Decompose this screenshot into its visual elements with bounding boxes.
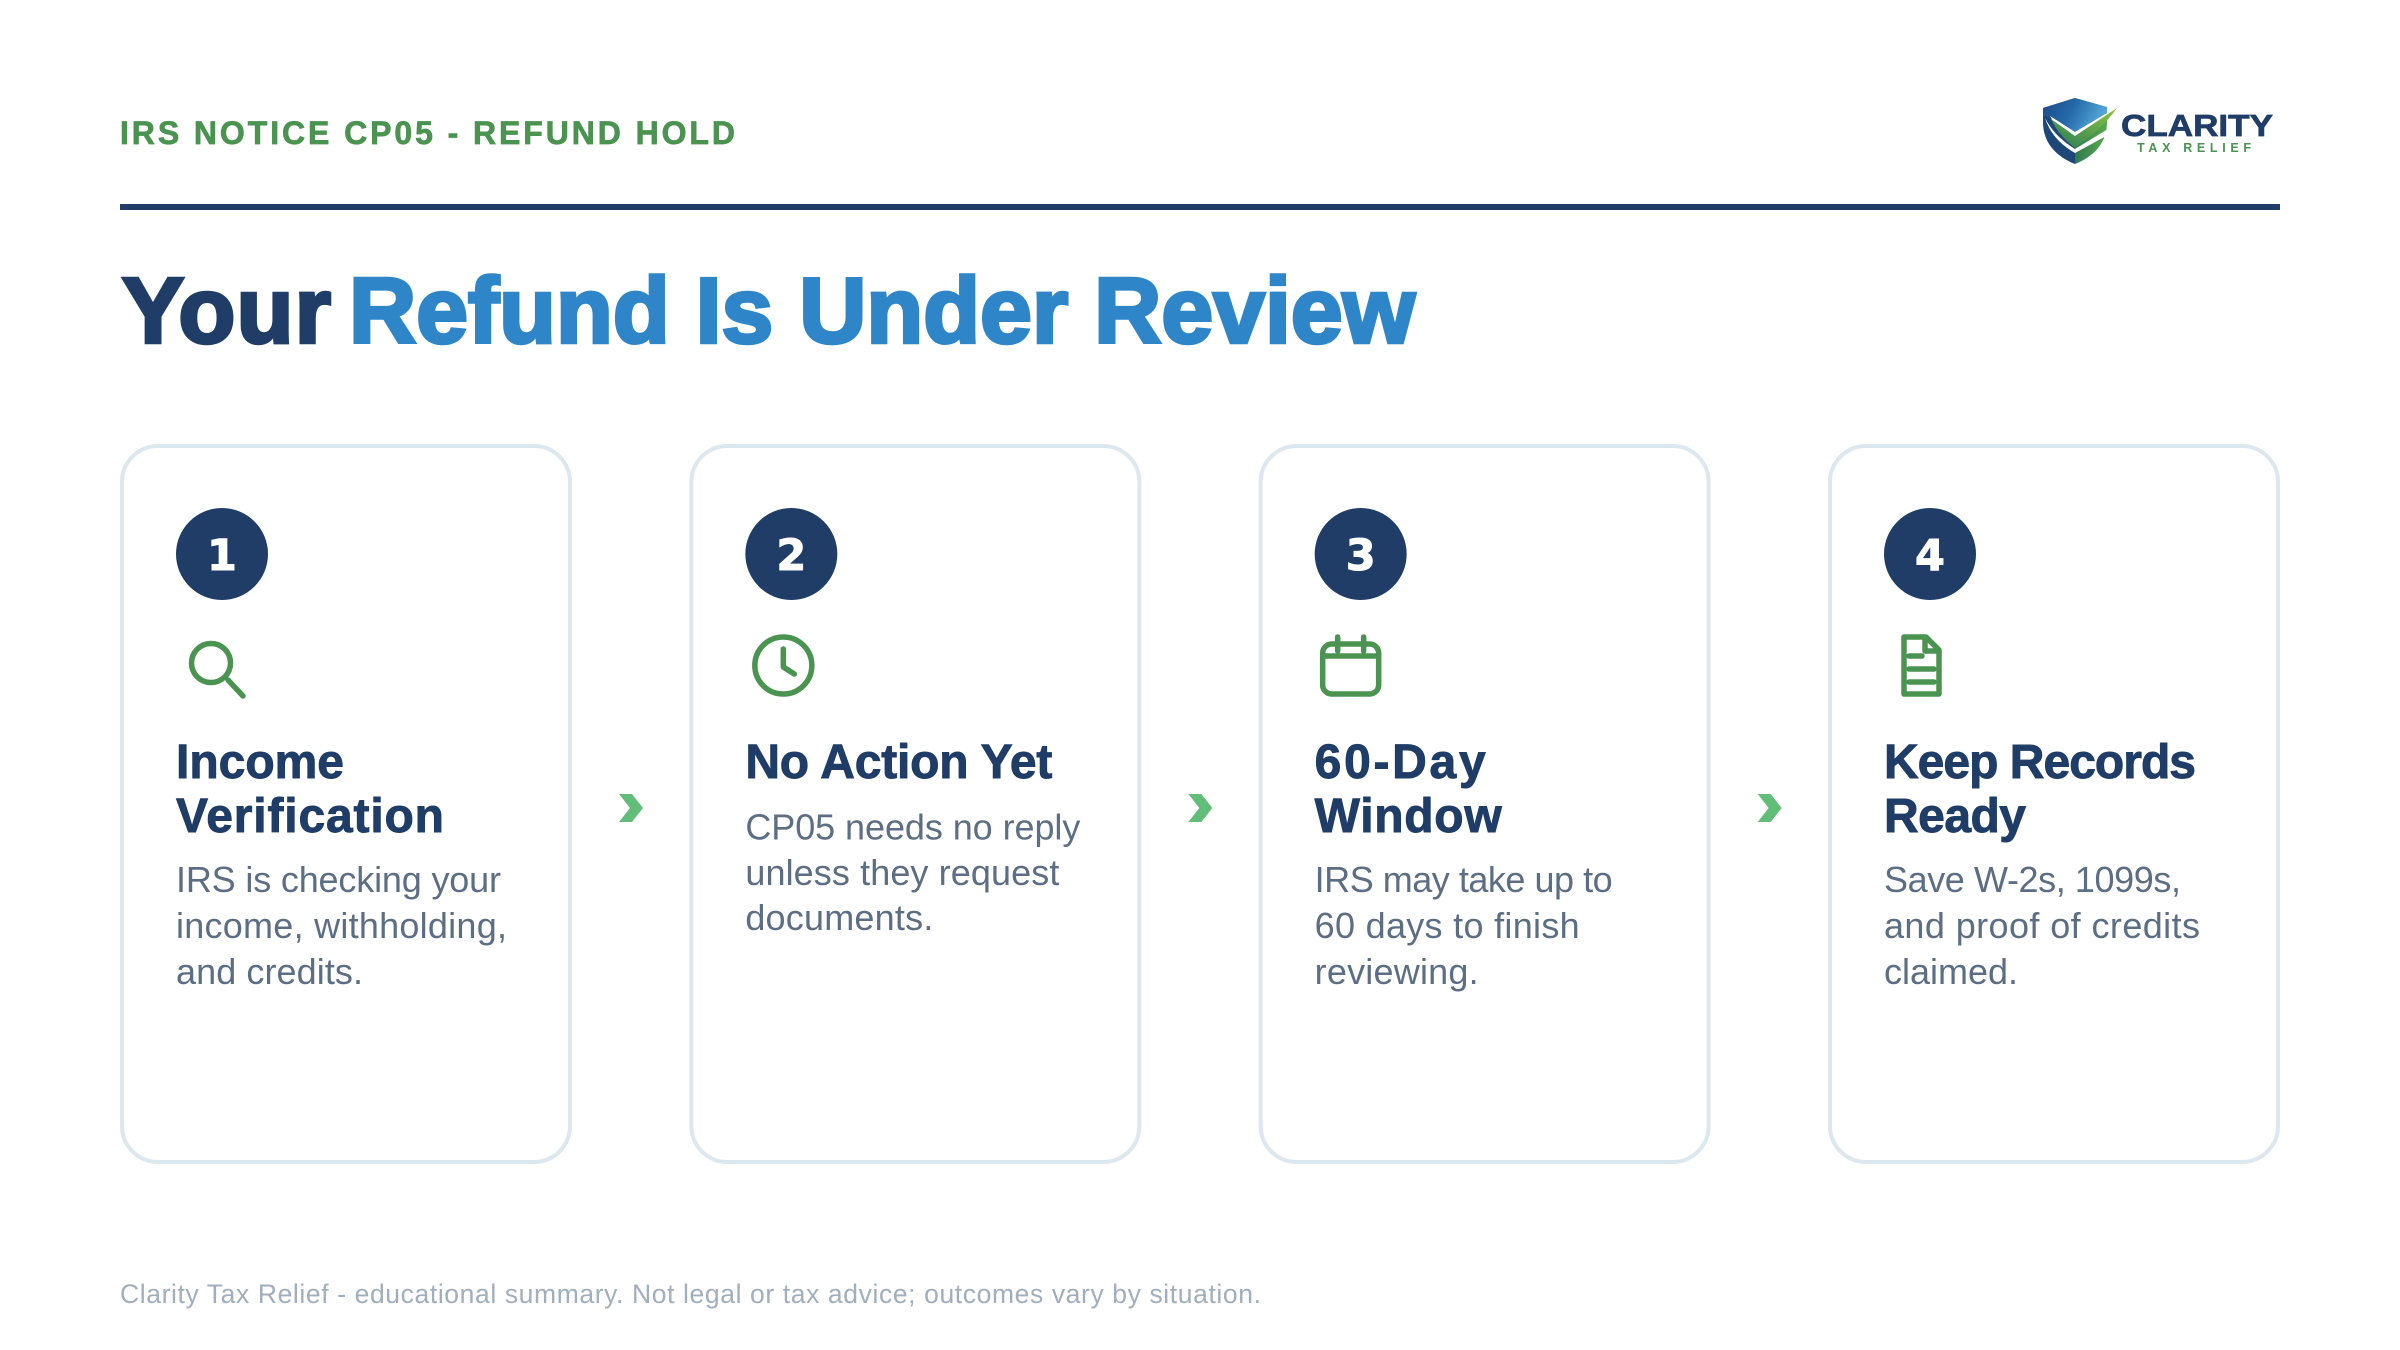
body text: and proof of credits (1884, 905, 2200, 946)
body text: CP05 needs no reply (745, 806, 1080, 848)
icon: calendar (1323, 637, 1379, 694)
icon: document (1904, 637, 1939, 694)
panel: step 1 income verification (122, 446, 570, 1162)
heading: Income (176, 736, 344, 789)
heading: Ready (1884, 790, 2026, 843)
arrow 1 (619, 794, 643, 822)
body text: Save W-2s, 1099s, (1884, 859, 2181, 900)
body text (176, 859, 507, 992)
body text: income, withholding, (176, 905, 507, 946)
logo tagline: TAX RELIEF (2137, 141, 2251, 155)
heading: 60-Day (1315, 736, 1486, 789)
icon: magnifier (192, 644, 243, 696)
title: Refund Is Under Review (349, 258, 1416, 362)
arrow 2 (1188, 794, 1212, 822)
logo wordmark: CLARITY (2121, 108, 2273, 143)
footer disclaimer: Clarity Tax Relief - educational summary. Not legal or tax advice; outcomes vary by situation. (120, 1279, 1261, 1309)
step number 1: 1 (207, 531, 237, 581)
body text (1884, 859, 2200, 992)
body text: documents. (745, 897, 933, 938)
icon: shield (2043, 98, 2117, 164)
step number 4: 4 (1915, 531, 1945, 581)
heading: Keep Records (1884, 736, 2196, 789)
eyebrow: notice label: IRS NOTICE CP05 - REFUND HOLD (120, 115, 735, 151)
body text (745, 806, 1080, 938)
heading: Verification (176, 790, 444, 843)
header rule (120, 204, 2280, 210)
body text: claimed. (1884, 951, 2018, 992)
body text (1315, 859, 1613, 992)
step number 2 (745, 508, 837, 600)
step number 3: 3 (1346, 531, 1376, 581)
step number 4 (1884, 508, 1976, 600)
icon: clock (755, 637, 812, 694)
heading (1315, 736, 1502, 843)
title: Your (122, 258, 331, 362)
step number 3 (1315, 508, 1407, 600)
body text: IRS may take up to (1315, 859, 1613, 900)
step number 1 (176, 508, 268, 600)
body text: IRS is checking your (176, 859, 501, 900)
heading (1884, 736, 2196, 843)
body text: and credits. (176, 951, 363, 992)
heading: No Action Yet (745, 736, 1052, 789)
panel: step 2 no action yet (691, 446, 1139, 1162)
step number 2: 2 (776, 531, 806, 581)
body text: 60 days to finish (1315, 905, 1580, 946)
panel: step 3 60-day window (1261, 446, 1709, 1162)
panel: step 4 keep records ready (1830, 446, 2278, 1162)
heading: Window (1315, 790, 1502, 843)
logo: Clarity Tax Relief (2043, 98, 2273, 164)
body text: unless they request (745, 852, 1059, 893)
heading (176, 736, 444, 843)
arrow 3 (1758, 794, 1782, 822)
body text: reviewing. (1315, 951, 1479, 992)
